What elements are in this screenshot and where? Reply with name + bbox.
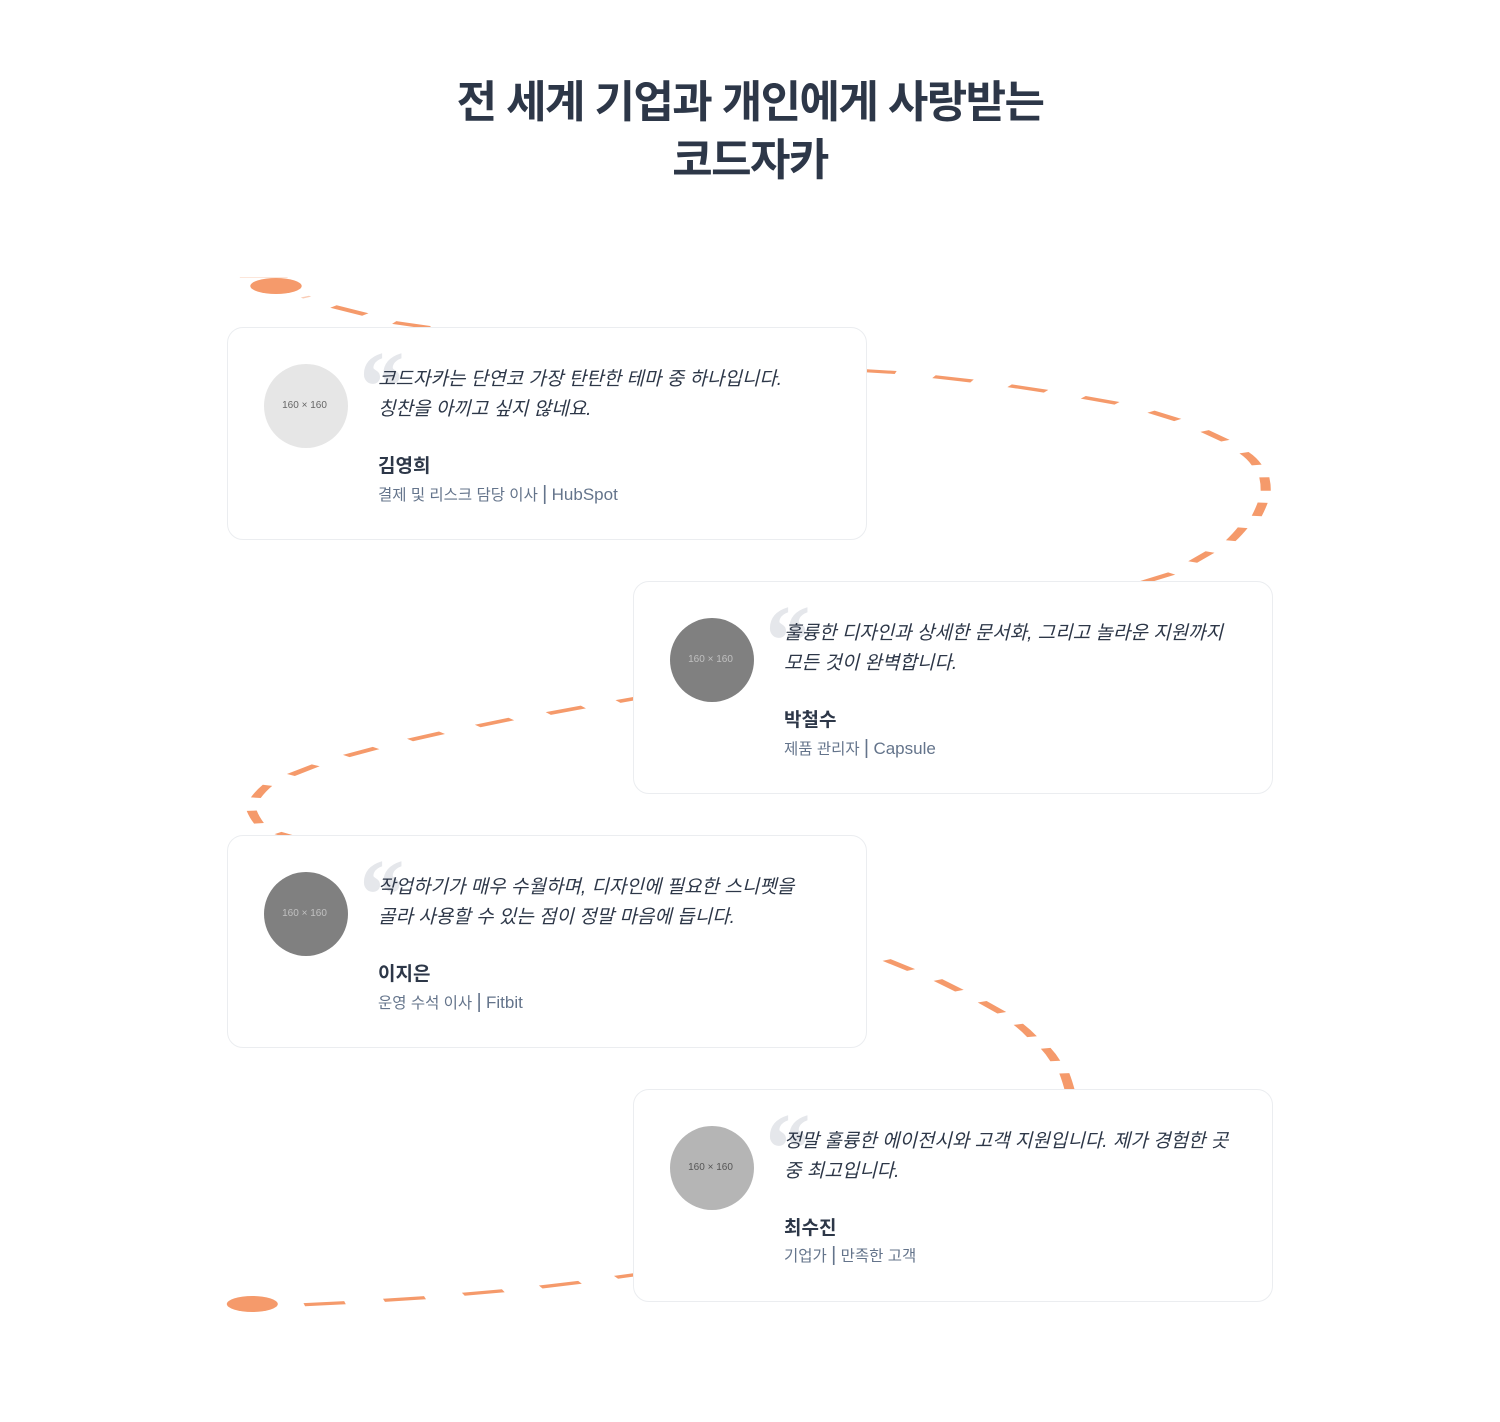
panel: testimonial 2: [633, 581, 1273, 794]
panel: testimonial 3: [227, 835, 867, 1048]
author name 3: 이지은: [378, 964, 430, 984]
quote text 2: [784, 622, 1224, 674]
title: 전 세계 기업과 개인에게 사랑받는: [457, 78, 1043, 127]
quote text 3: 골라 사용할 수 있는 점이 정말 마음에 듭니다.: [378, 906, 735, 928]
author name 1: 김영희: [378, 456, 430, 476]
avatar placeholder 4: [670, 1126, 754, 1210]
quote text 3: [378, 876, 796, 928]
title: 코드자카: [672, 136, 828, 185]
panel: testimonial 1: [227, 327, 867, 540]
author role 4: 기업가 | 만족한 고객: [784, 1244, 916, 1266]
avatar placeholder 3: 160 × 160: [282, 908, 327, 919]
quote mark 1: “: [360, 333, 404, 442]
avatar placeholder 1: [264, 364, 348, 448]
end dot: [227, 1296, 278, 1312]
avatar placeholder 4: 160 × 160: [688, 1162, 733, 1173]
avatar placeholder 2: [670, 618, 754, 702]
author role 1: 결제 및 리스크 담당 이사 | HubSpot: [378, 483, 618, 505]
start dot: [250, 278, 302, 294]
author name 2: 박철수: [784, 710, 836, 730]
quote text 3: 작업하기가 매우 수월하며, 디자인에 필요한 스니펫을: [378, 876, 794, 898]
quote text 1: 칭찬을 아끼고 싶지 않네요.: [378, 398, 591, 420]
avatar placeholder 2: 160 × 160: [688, 654, 733, 665]
quote text 4: [784, 1130, 1230, 1182]
author role 3: 운영 수석 이사 | Fitbit: [378, 991, 523, 1013]
dashes: [240, 277, 1266, 1305]
author role 2: 제품 관리자 | Capsule: [784, 737, 936, 759]
quote text 4: 정말 훌륭한 에이전시와 고객 지원입니다. 제가 경험한 곳: [784, 1130, 1228, 1152]
quote mark 4: “: [766, 1095, 810, 1204]
quote text 1: [378, 368, 782, 420]
avatar placeholder 3: [264, 872, 348, 956]
quote mark 3: “: [360, 841, 404, 950]
quote text 1: 코드자카는 단연코 가장 탄탄한 테마 중 하나입니다.: [378, 368, 782, 390]
quote text 2: 모든 것이 완벽합니다.: [784, 652, 957, 674]
quote text 2: 훌륭한 디자인과 상세한 문서화, 그리고 놀라운 지원까지: [784, 622, 1223, 644]
avatar placeholder 1: 160 × 160: [282, 400, 327, 411]
panel: testimonial 4: [633, 1089, 1273, 1302]
author name 4: 최수진: [784, 1218, 836, 1238]
quote text 4: 중 최고입니다.: [784, 1160, 899, 1182]
quote mark 2: “: [766, 587, 810, 696]
title: [457, 78, 1044, 185]
